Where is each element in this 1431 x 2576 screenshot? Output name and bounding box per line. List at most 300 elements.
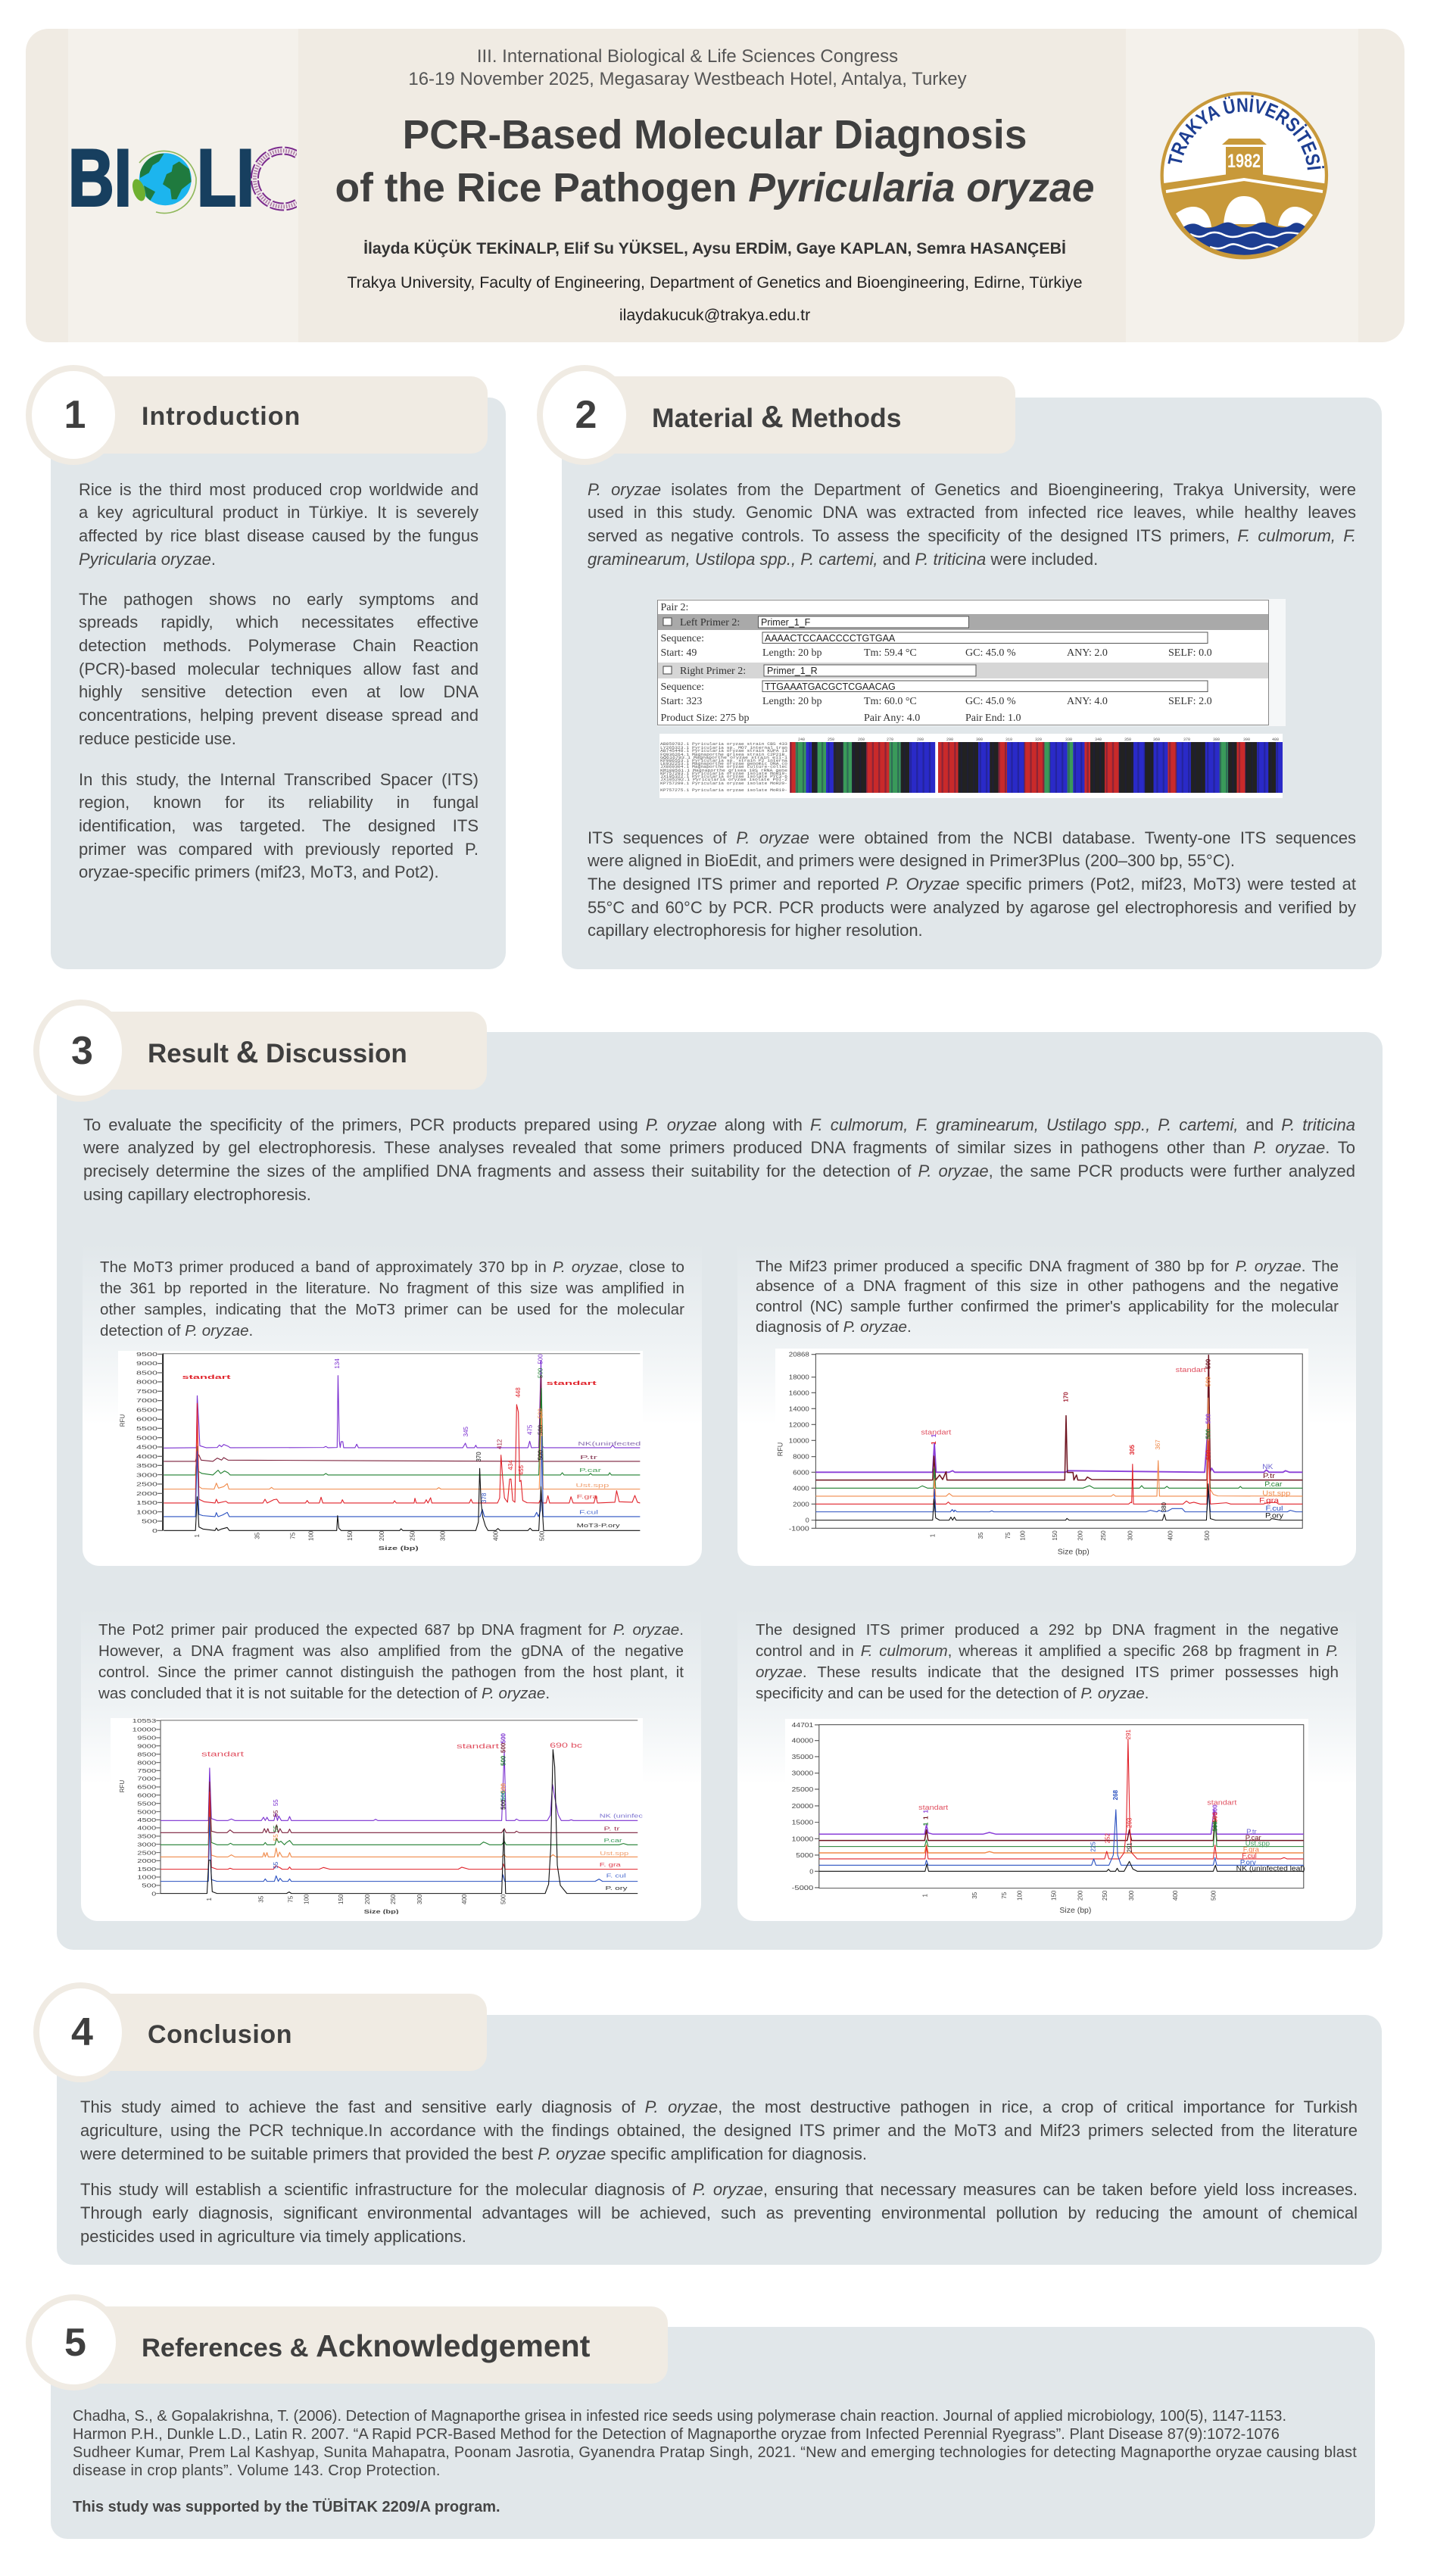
chart: Pot2 capillary electropherogram: 6500 — [137, 1784, 156, 1791]
chart: MoT3 capillary electropherogram: 500 — [142, 1518, 157, 1525]
chart: Pot2 capillary electropherogram: RFU — [119, 1780, 126, 1792]
logo: BIOLIC — [71, 144, 297, 216]
chart: MoT3 capillary electropherogram: 2500 — [136, 1481, 157, 1488]
text: references: Chadha, S., & Gopalakrishna, T. (2006). Detection of Magnaporthe grisea in infested rice seeds using polymerase chain reaction. Journal of applied microbiology, 100(5), 1147-1153. — [73, 2408, 1286, 2425]
text: Pot2 result: control. Since the primer cannot distinguish the pathogen from the host plant, it — [98, 1664, 684, 1681]
congress name: III. International Biological & Life Sciences Congress — [477, 46, 898, 67]
chart: ITS capillary electropherogram: P.tr — [1246, 1828, 1257, 1836]
chart: Mif23 capillary electropherogram: P.tr — [1263, 1472, 1275, 1480]
text: introduction paragraph 2: reduce pesticide use. — [79, 729, 236, 748]
authors: İlayda KÜÇÜK TEKİNALP, Elif Su YÜKSEL, Aysu ERDİM, Gaye KAPLAN, Semra HASANÇEBİ — [363, 239, 1066, 257]
chart: MoT3 capillary electropherogram: 4000 — [136, 1453, 157, 1460]
text: conclusion paragraph 1: agriculture, using the PCR technique.In accordance with the findings obtained, the designed ITS primer and the MoT3 and Mif23 primers selected from the literature — [80, 2121, 1358, 2140]
chart: Pot2 capillary electropherogram: 500 — [500, 1799, 507, 1810]
card: Pot2 primer — [81, 1609, 701, 1921]
text: introduction paragraph 3: identification, was targeted. The designed ITS — [79, 816, 479, 835]
chart: ITS capillary electropherogram: 1 — [922, 1894, 929, 1898]
chart: ITS capillary electropherogram: F.cul — [1242, 1852, 1257, 1860]
text: ITS result: specificity and can be used for the detection of P. oryzae. — [756, 1685, 1149, 1702]
heading: References & Acknowledgement — [142, 2328, 590, 2363]
chart: MoT3 capillary electropherogram: 370 — [475, 1452, 482, 1462]
chart: ITS capillary electropherogram: Size (bp) — [1059, 1907, 1091, 1915]
text: acknowledgement: This study was supported by the TÜBİTAK 2209/A program. — [73, 2499, 500, 2515]
chart: Pot2 capillary electropherogram: 55 — [273, 1799, 279, 1806]
chart: Pot2 capillary electropherogram — [111, 1718, 643, 1914]
chart: ITS capillary electropherogram: 5000 — [796, 1851, 814, 1859]
text: conclusion paragraph 1: were determined to be suitable primers that provided the best P. oryzae specific amplification for diagnosis. — [80, 2144, 867, 2163]
section 2: Material and Methods — [537, 365, 1382, 969]
chart: ITS capillary electropherogram: Ust.spp — [1246, 1840, 1270, 1848]
chart: Mif23 capillary electropherogram: 20868 — [789, 1351, 809, 1358]
chart: MoT3 capillary electropherogram: NK(uninfected — [578, 1440, 641, 1447]
figure: BioEdit sequence alignment: JX105322.1 Pyricularia oryzae isolate PYC3-6 — [660, 775, 787, 779]
chart: MoT3 capillary electropherogram — [118, 1351, 643, 1552]
text: ITS result — [756, 1621, 1339, 1702]
chart: Mif23 capillary electropherogram: 150 — [1052, 1530, 1058, 1541]
heading bar — [41, 376, 488, 454]
chart: Pot2 capillary electropherogram: 200 — [364, 1894, 371, 1904]
chart: Pot2 capillary electropherogram: NK (uninfec — [600, 1813, 643, 1819]
chart: ITS capillary electropherogram: 291 — [1126, 1842, 1133, 1853]
chart: Pot2 capillary electropherogram: 1500 — [137, 1866, 156, 1873]
number badge — [26, 2294, 122, 2390]
figure: BioEdit sequence alignment: JX105292.1 Pyricularia oryzae isolate POI-2 — [660, 778, 787, 782]
card: designed ITS primer — [737, 1609, 1356, 1921]
right primer row — [658, 663, 1268, 678]
chart: Pot2 capillary electropherogram: 250 — [390, 1894, 397, 1904]
card: MoT3 primer — [83, 1244, 702, 1566]
chart: Mif23 capillary electropherogram: 300 — [1127, 1530, 1134, 1541]
chart: MoT3 capillary electropherogram: standart — [547, 1380, 597, 1386]
chart: Pot2 capillary electropherogram: 2500 — [137, 1849, 156, 1856]
chart: MoT3 capillary electropherogram: 300 — [440, 1530, 447, 1541]
chart: ITS capillary electropherogram: 40000 — [792, 1737, 814, 1745]
figure: Primer3Plus result table: Start: 49 — [660, 647, 697, 659]
chart: Pot2 capillary electropherogram: P. tr — [604, 1825, 620, 1832]
header banner — [26, 29, 1404, 342]
chart: ITS capillary electropherogram: 44701 — [792, 1721, 814, 1729]
chart: ITS capillary electropherogram: 1 — [923, 1822, 930, 1826]
chart: ITS capillary electropherogram: 500 — [1211, 1821, 1218, 1832]
figure: Primer3Plus result table: SELF: 2.0 — [1168, 696, 1212, 707]
text: Pot2 result: However, a DNA fragment was also amplified from the gDNA of the negative — [98, 1642, 684, 1660]
chart: MoT3 capillary electropherogram: 200 — [379, 1530, 385, 1541]
chart: Mif23 capillary electropherogram: P.ory — [1265, 1512, 1283, 1520]
chart: Mif23 capillary electropherogram: 100 — [1019, 1530, 1026, 1541]
chart: ITS capillary electropherogram: 293 — [1126, 1817, 1133, 1828]
chart: Mif23 capillary electropherogram: NK — [1262, 1463, 1274, 1471]
chart: Pot2 capillary electropherogram: 2000 — [137, 1857, 156, 1864]
chart: Mif23 capillary electropherogram — [775, 1349, 1308, 1557]
text: conclusion paragraph 2: pesticides used in agriculture via timely applications. — [80, 2226, 466, 2246]
figure: BioEdit sequence alignment: 260 — [858, 738, 865, 742]
figure: Primer3Plus result table: Sequence: — [660, 633, 704, 644]
figure: Primer3Plus result table: Product Size: 275 bp — [660, 713, 750, 724]
chart: Pot2 capillary electropherogram: 0 — [151, 1890, 156, 1897]
right primer row: Right Primer 2: — [680, 666, 746, 677]
chart: ITS capillary electropherogram: 10000 — [792, 1835, 814, 1842]
number badge — [537, 365, 632, 465]
chart: MoT3 capillary electropherogram: 1500 — [136, 1499, 157, 1506]
left primer row — [658, 614, 1268, 630]
chart: MoT3 capillary electropherogram: 8500 — [136, 1369, 157, 1376]
chart: Mif23 capillary electropherogram: 6000 — [793, 1468, 809, 1476]
chart: ITS capillary electropherogram: 20000 — [792, 1802, 814, 1810]
text: Mif23 result: absence of a DNA fragment of this size in other pathogens and the negative — [756, 1277, 1339, 1295]
heading bar — [48, 1012, 487, 1090]
chart: Pot2 capillary electropherogram: 7000 — [137, 1776, 156, 1782]
chart: Pot2 capillary electropherogram: 1000 — [137, 1874, 156, 1881]
text: introduction paragraph 1: Rice is the third most produced crop worldwide and — [79, 480, 479, 499]
text: references — [73, 2408, 1357, 2479]
chart: Mif23 capillary electropherogram: 305 — [1129, 1444, 1136, 1455]
title — [335, 113, 1094, 211]
chart: MoT3 capillary electropherogram: 455 — [518, 1464, 525, 1475]
chart: MoT3 capillary electropherogram: Size (bp) — [379, 1545, 419, 1552]
figure: BioEdit sequence alignment: AB059782.1 Pyricularia oryzae strain CBS 433 — [660, 742, 787, 747]
chart: Pot2 capillary electropherogram: 10000 — [132, 1726, 156, 1733]
logo: Trakya University seal — [1160, 91, 1328, 259]
chart: ITS capillary electropherogram: 268 — [1112, 1789, 1119, 1800]
figure: BioEdit sequence alignment: KF986553.1 Pyricularia sp. strain P2 interna — [660, 759, 787, 763]
chart: Mif23 capillary electropherogram: 500 — [1204, 1530, 1211, 1541]
title: PCR-Based Molecular Diagnosis — [403, 113, 1027, 157]
chart: Pot2 capillary electropherogram: 7500 — [137, 1767, 156, 1774]
figure: BioEdit sequence alignment — [659, 734, 1283, 798]
text: references: Harmon P.H., Dunkle L.D., Latin R. 2007. “A Rapid PCR-Based Method for the Detection of Magnaporthe oryzae from Infected Perennial Ryegrass”. Plant Disease 87(9):1072-1076 — [73, 2426, 1280, 2443]
chart: Pot2 capillary electropherogram: P. ory — [606, 1885, 628, 1891]
figure: BioEdit sequence alignment: 270 — [887, 738, 893, 742]
chart: ITS capillary electropherogram: 0 — [809, 1867, 814, 1875]
chart: Mif23 capillary electropherogram: 1 — [931, 1441, 937, 1445]
chart: MoT3 capillary electropherogram: 134 — [334, 1358, 341, 1369]
chart: Pot2 capillary electropherogram: 400 — [461, 1894, 468, 1904]
section 1: Introduction — [26, 365, 506, 969]
text: introduction paragraph 3: oryzae-specific primers (mif23, MoT3, and Pot2). — [79, 862, 439, 881]
chart: MoT3 capillary electropherogram: 250 — [409, 1530, 416, 1541]
text: introduction paragraph 1 — [79, 480, 479, 569]
chart: ITS capillary electropherogram: 250 — [1102, 1890, 1108, 1901]
chart: ITS capillary electropherogram: 200 — [1077, 1890, 1083, 1901]
figure: BioEdit sequence alignment: 380 — [1213, 738, 1220, 742]
text: conclusion paragraph 2 — [80, 2179, 1358, 2246]
chart: MoT3 capillary electropherogram: Ust.spp — [575, 1482, 609, 1489]
chart: Mif23 capillary electropherogram: 250 — [1100, 1530, 1107, 1541]
figure: BioEdit sequence alignment: KP757293.1 Pyricularia oryzae isolate MoR19- — [660, 772, 787, 776]
figure: Primer3Plus result table: GC: 45.0 % — [965, 647, 1016, 659]
left logo band — [68, 29, 298, 342]
text: Pot2 result: was concluded that it is not suitable for the detection of P. oryzae. — [98, 1685, 550, 1702]
figure: BioEdit sequence alignment: FQ936264.1 Magnaporthe grisea strain C2P21B. — [660, 753, 787, 757]
text: introduction paragraph 1: Pyricularia oryzae. — [79, 550, 216, 569]
text: results introduction: were analyzed by gel electrophoresis. These analyses revealed that some primers produced DNA fragments of similar sizes in pathogens other than P. oryzae. To — [83, 1138, 1355, 1157]
figure: BioEdit sequence alignment: 310 — [1005, 738, 1012, 742]
number badge: 5 — [64, 2320, 86, 2364]
card: Mif23 primer — [737, 1244, 1356, 1566]
text: conclusion paragraph 2: This study will establish a scientific infrastructure for the molecular diagnosis of P. oryzae, ensuring that necessary measures can be taken before yield loss increases. — [80, 2179, 1358, 2199]
chart: MoT3 capillary electropherogram: 3000 — [136, 1471, 157, 1478]
chart: MoT3 capillary electropherogram: MoT3-P.ory — [577, 1522, 620, 1529]
figure: BioEdit sequence alignment: GQ616793.1 Magnaporthe oryzae strain e11-1 — [660, 756, 787, 760]
figure: BioEdit sequence alignment: 320 — [1035, 738, 1042, 742]
chart: MoT3 capillary electropherogram: 9000 — [136, 1360, 157, 1367]
text: Pot2 result: The Pot2 primer pair produced the expected 687 bp DNA fragment for P. oryzae. — [98, 1621, 684, 1639]
right logo band — [1126, 29, 1358, 342]
chart: Pot2 capillary electropherogram: standart — [457, 1742, 500, 1750]
text: introduction paragraph 2 — [79, 590, 479, 748]
chart: MoT3 capillary electropherogram: 345 — [463, 1426, 469, 1436]
chart: Mif23 capillary electropherogram: 500 — [1205, 1376, 1211, 1386]
number badge — [33, 1000, 128, 1102]
figure: Primer3Plus result table: AAAACTCCAACCCCTGTGAA — [765, 633, 896, 644]
figure: Primer3Plus result table: Tm: 59.4 °C — [864, 647, 917, 659]
chart: Mif23 capillary electropherogram: 500 — [1205, 1449, 1211, 1460]
text: results introduction: using capillary electrophoresis. — [83, 1185, 311, 1204]
chart: Pot2 capillary electropherogram: 4500 — [137, 1817, 156, 1823]
number badge: 1 — [64, 393, 86, 437]
logo: Trakya University seal: TRAKYA ÜNİVERSİTESİ — [1168, 95, 1324, 170]
text: conclusion paragraph 2: Through early diagnosis, significant environmental advantages will be achieved, such as preventing environmental pollution by reducing the amount of chemical — [80, 2203, 1358, 2222]
panel: methods background — [562, 398, 1382, 969]
chart: ITS capillary electropherogram: 252 — [1105, 1832, 1111, 1843]
chart: ITS capillary electropherogram: 300 — [1128, 1890, 1135, 1901]
chart: Pot2 capillary electropherogram: standart — [201, 1750, 245, 1757]
text: introduction paragraph 3: primer was compared with previously reported P. — [79, 840, 479, 859]
text: methods paragraph 1: P. oryzae isolates from the Department of Genetics and Bioengineering, Trakya University, were — [588, 480, 1356, 499]
chart: Pot2 capillary electropherogram: 5000 — [137, 1808, 156, 1815]
chart: Mif23 capillary electropherogram: Ust.spp — [1262, 1489, 1290, 1498]
chart: Mif23 capillary electropherogram: 12000 — [789, 1421, 809, 1428]
chart: MoT3 capillary electropherogram: 150 — [347, 1530, 354, 1541]
panel: results background — [57, 1032, 1383, 1950]
chart: ITS capillary electropherogram: 500 — [1211, 1890, 1217, 1901]
chart: Mif23 capillary electropherogram: 1 — [931, 1433, 937, 1437]
chart: MoT3 capillary electropherogram: 35 — [254, 1532, 260, 1539]
figure: Primer3Plus result table: GC: 45.0 % — [965, 696, 1016, 707]
chart: Pot2 capillary electropherogram: 690 bc — [550, 1742, 583, 1749]
chart: ITS capillary electropherogram: -5000 — [792, 1884, 814, 1891]
chart: Pot2 capillary electropherogram: 55 — [273, 1861, 279, 1869]
chart: Mif23 capillary electropherogram: P.car — [1264, 1480, 1282, 1489]
chart: Mif23 capillary electropherogram: 1 — [930, 1533, 937, 1537]
chart: Mif23 capillary electropherogram: Size (bp) — [1058, 1548, 1090, 1557]
chart: Mif23 capillary electropherogram: standart — [921, 1429, 952, 1436]
chart: MoT3 capillary electropherogram: 500 — [538, 1368, 544, 1378]
chart: ITS capillary electropherogram: standart — [1207, 1799, 1237, 1807]
text: Mif23 result: diagnosis of P. oryzae. — [756, 1318, 912, 1336]
chart: ITS capillary electropherogram: 75 — [1001, 1891, 1008, 1899]
chart: ITS capillary electropherogram: 100 — [1017, 1890, 1024, 1901]
chart: MoT3 capillary electropherogram: standart — [182, 1374, 232, 1380]
text: MoT3 result: The MoT3 primer produced a band of approximately 370 bp in P. oryzae, close to — [100, 1258, 684, 1276]
heading: Material & Methods — [652, 399, 901, 434]
figure: BioEdit sequence alignment: LE932253.1 Magnaporthe oryzae genomic DNA co — [660, 762, 787, 766]
chart: MoT3 capillary electropherogram: RFU — [119, 1414, 126, 1427]
figure: BioEdit sequence alignment: LY265323.1 Pyricularia sp. MO7 internal tran — [660, 746, 787, 750]
chart: Pot2 capillary electropherogram: 500 — [500, 1790, 507, 1801]
chart: MoT3 capillary electropherogram: 4500 — [136, 1443, 157, 1451]
chart: MoT3 capillary electropherogram: 400 — [493, 1530, 500, 1541]
text: introduction paragraph 2: concentrations, helping prevent disease spread and — [79, 706, 479, 725]
chart: Mif23 capillary electropherogram: 0 — [806, 1517, 809, 1524]
figure: BioEdit sequence alignment: 290 — [946, 738, 953, 742]
figure: BioEdit sequence alignment: KM100561.1 Magnaporthe grisea 18S rRNA gene — [660, 769, 787, 773]
chart: Mif23 capillary electropherogram: F.cul — [1266, 1505, 1283, 1513]
chart: Pot2 capillary electropherogram: 500 — [500, 1782, 507, 1793]
chart: Mif23 capillary electropherogram: standart — [1176, 1366, 1206, 1374]
heading: Introduction — [142, 402, 301, 431]
chart: Pot2 capillary electropherogram: 5500 — [137, 1800, 156, 1807]
text: methods paragraph 2: ITS sequences of P. oryzae were obtained from the NCBI database. Twenty-one ITS sequences — [588, 828, 1356, 847]
chart: ITS capillary electropherogram: 400 — [1172, 1890, 1179, 1901]
title: of the Rice Pathogen Pyricularia oryzae — [335, 166, 1094, 211]
figure: Primer3Plus result table: TTGAAATGACGCTCGAACAG — [765, 681, 896, 692]
figure: Primer3Plus result table: ANY: 4.0 — [1067, 696, 1108, 707]
chart: Mif23 capillary electropherogram: 16000 — [789, 1389, 809, 1396]
text: MoT3 result: other samples, indicating that the MoT3 primer can be used for the molecular — [100, 1301, 684, 1318]
figure: BioEdit sequence alignment: 240 — [798, 738, 805, 742]
chart: MoT3 capillary electropherogram: 448 — [515, 1387, 522, 1398]
chart: Mif23 capillary electropherogram: 4000 — [793, 1484, 809, 1492]
text: methods paragraph 1 — [588, 480, 1356, 569]
chart: Mif23 capillary electropherogram: 380 — [1161, 1502, 1168, 1512]
chart: ITS capillary electropherogram: 291 — [1125, 1729, 1132, 1739]
chart: MoT3 capillary electropherogram: 1000 — [136, 1508, 157, 1515]
figure: Primer3Plus result table: Length: 20 bp — [762, 647, 822, 659]
chart: MoT3 capillary electropherogram: 5500 — [136, 1425, 157, 1432]
figure: BioEdit sequence alignment: 250 — [828, 738, 834, 742]
chart: MoT3 capillary electropherogram: 434 — [507, 1460, 514, 1470]
chart: Pot2 capillary electropherogram: 8500 — [137, 1751, 156, 1757]
chart: Pot2 capillary electropherogram: 75 — [287, 1895, 294, 1903]
text: references: Sudheer Kumar, Prem Lal Kashyap, Sunita Mahapatra, Poonam Jasrotia, Gyanendra Pratap Singh, 2021. “New and emerging technologies for detecting Magnaporthe oryzae causing blast — [73, 2444, 1357, 2461]
chart: Pot2 capillary electropherogram: 9000 — [137, 1742, 156, 1749]
chart: MoT3 capillary electropherogram: 412 — [497, 1439, 504, 1449]
figure: BioEdit sequence alignment: 360 — [1153, 738, 1160, 742]
chart: Pot2 capillary electropherogram: 55 — [273, 1825, 279, 1832]
figure: BioEdit sequence alignment: 330 — [1065, 738, 1072, 742]
email: ilaydakucuk@trakya.edu.tr — [619, 306, 810, 324]
chart: Pot2 capillary electropherogram: F. gra — [600, 1861, 622, 1868]
chart: ITS capillary electropherogram: 150 — [1050, 1890, 1057, 1901]
chart: MoT3 capillary electropherogram: 7000 — [136, 1397, 157, 1404]
heading bar — [48, 1994, 487, 2071]
affiliation: Trakya University, Faculty of Engineering, Department of Genetics and Bioengineering, Edirne, Türkiye — [347, 273, 1082, 292]
chart: Pot2 capillary electropherogram: 3500 — [137, 1833, 156, 1840]
text: Mif23 result: control (NC) sample further confirmed the primer's applicability for the molecular — [756, 1298, 1339, 1315]
text: introduction paragraph 3 — [79, 770, 479, 881]
figure: Primer3Plus result table: Pair End: 1.0 — [965, 713, 1021, 724]
figure: Primer3Plus result table: Start: 323 — [660, 696, 702, 707]
chart: Pot2 capillary electropherogram: 300 — [416, 1894, 423, 1904]
section 3: Result and Discussion — [33, 1000, 1383, 1950]
chart: Pot2 capillary electropherogram: 35 — [257, 1895, 264, 1903]
text: methods paragraph 1: graminearum, Ustilopa spp., P. cartemi, and P. triticina were included. — [588, 550, 1098, 569]
heading: Result & Discussion — [148, 1034, 407, 1069]
text: Pot2 result — [98, 1621, 684, 1702]
figure: BioEdit sequence alignment: 340 — [1095, 738, 1102, 742]
chart: Pot2 capillary electropherogram: 4000 — [137, 1825, 156, 1832]
text: conclusion paragraph 1 — [80, 2097, 1358, 2163]
chart: Pot2 capillary electropherogram: 3000 — [137, 1841, 156, 1848]
chart: Mif23 capillary electropherogram: 500 — [1205, 1358, 1211, 1369]
heading bar — [41, 2306, 668, 2384]
chart: MoT3 capillary electropherogram: P.car — [579, 1467, 602, 1474]
chart: MoT3 capillary electropherogram: 500 — [538, 1449, 544, 1460]
text: introduction paragraph 2: The pathogen shows no early symptoms and — [79, 590, 479, 609]
chart: Pot2 capillary electropherogram: 500 — [500, 1755, 507, 1766]
figure: BioEdit sequence alignment: 390 — [1243, 738, 1250, 742]
text: ITS result: oryzae. These results indicate that the designed ITS primer possesses high — [756, 1664, 1339, 1681]
panel: introduction background — [51, 398, 506, 969]
figure: Primer3Plus result table: ANY: 2.0 — [1067, 647, 1108, 659]
text: introduction paragraph 2: (PCR)-based molecular techniques allow fast and — [79, 660, 479, 678]
text: methods paragraph 1: used in this study. Genomic DNA was extracted from infected rice leaves, while healthy leaves — [588, 503, 1356, 522]
number badge: 2 — [575, 393, 597, 437]
text: introduction paragraph 1: affected by rice blast disease caused by the fungus — [79, 526, 479, 545]
chart: MoT3 capillary electropherogram: 75 — [289, 1532, 296, 1539]
chart: Mif23 capillary electropherogram: 500 — [1205, 1413, 1211, 1424]
chart: Mif23 capillary electropherogram: 367 — [1155, 1439, 1161, 1450]
figure: Primer3Plus result table — [657, 599, 1286, 726]
chart: Mif23 capillary electropherogram: 170 — [1063, 1392, 1070, 1402]
heading bar — [552, 376, 1015, 454]
chart: MoT3 capillary electropherogram: 378 — [481, 1492, 488, 1503]
figure: Primer3Plus result table: Pair 2: — [660, 602, 688, 613]
chart: Pot2 capillary electropherogram: 500 — [500, 1742, 507, 1753]
number badge: 3 — [71, 1028, 93, 1072]
panel: conclusion background — [57, 2015, 1382, 2265]
text: references: disease in crop plants”. Volume 143. Crop Protection. — [73, 2462, 441, 2479]
number badge — [33, 1982, 128, 2082]
chart: Pot2 capillary electropherogram: 500 — [500, 1732, 507, 1743]
figure: BioEdit sequence alignment: KP757299.1 Pyricularia oryzae isolate MoR20- — [660, 781, 787, 786]
chart: Mif23 capillary electropherogram: F.gra — [1259, 1497, 1280, 1505]
text: introduction paragraph 2: highly sensitive detection even at low DNA — [79, 682, 479, 701]
text: ITS result: The designed ITS primer produced a 292 bp DNA fragment in the negative — [756, 1621, 1339, 1639]
logo: Trakya University seal: 1982 — [1227, 151, 1261, 172]
chart: Pot2 capillary electropherogram: Ust.spp — [600, 1850, 628, 1857]
chart: Pot2 capillary electropherogram: 500 — [500, 1894, 507, 1904]
heading: Conclusion — [148, 2020, 292, 2049]
figure: Primer3Plus result table: Pair Any: 4.0 — [864, 713, 920, 724]
chart: MoT3 capillary electropherogram: F.gra — [577, 1493, 599, 1500]
chart: ITS capillary electropherogram: 35 — [971, 1891, 978, 1899]
chart: MoT3 capillary electropherogram: 475 — [526, 1424, 533, 1435]
chart: Mif23 capillary electropherogram: -1000 — [789, 1524, 809, 1532]
chart: ITS capillary electropherogram: 500 — [1211, 1804, 1218, 1815]
chart: ITS capillary electropherogram: P.ory — [1240, 1859, 1256, 1867]
chart: Mif23 capillary electropherogram: 35 — [977, 1532, 984, 1539]
chart: Mif23 capillary electropherogram: 75 — [1005, 1532, 1012, 1539]
chart: Pot2 capillary electropherogram: 150 — [338, 1894, 344, 1904]
figure: Primer3Plus result table: SELF: 0.0 — [1168, 647, 1212, 659]
chart: ITS capillary electropherogram: 30000 — [792, 1770, 814, 1777]
chart: Mif23 capillary electropherogram: 200 — [1077, 1530, 1084, 1541]
chart: Mif23 capillary electropherogram: 14000 — [789, 1405, 809, 1412]
chart: MoT3 capillary electropherogram: 8000 — [136, 1379, 157, 1386]
figure: BioEdit sequence alignment: KP757275.1 Pyricularia oryzae isolate MoR19- — [660, 788, 787, 793]
chart: MoT3 capillary electropherogram: 500 — [538, 1530, 545, 1541]
text: MoT3 result — [100, 1258, 684, 1339]
text: introduction paragraph 2: spreads rapidly, which necessitates effective — [79, 613, 479, 632]
chart: Pot2 capillary electropherogram: 1 — [206, 1898, 213, 1901]
figure: BioEdit sequence alignment: JX869304.1 Magnaporthe oryzae culture-collec — [660, 765, 787, 769]
congress date and venue: 16-19 November 2025, Megasaray Westbeach Hotel, Antalya, Turkey — [408, 69, 967, 89]
figure: BioEdit sequence alignment: 400 — [1272, 738, 1279, 742]
chart: MoT3 capillary electropherogram: 6500 — [136, 1407, 157, 1413]
chart: MoT3 capillary electropherogram: 1 — [194, 1534, 201, 1538]
